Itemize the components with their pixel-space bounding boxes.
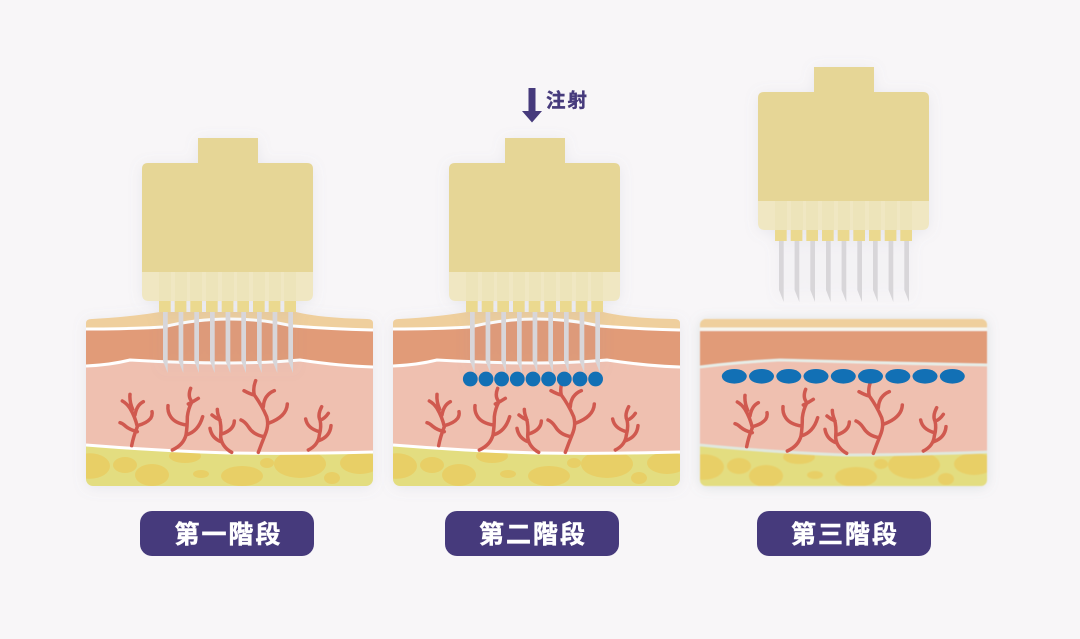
- stage 3 blood vessels: [735, 382, 946, 453]
- stage 3 spread droplets: [722, 369, 965, 384]
- stage 2 label: 第二階段: [479, 520, 587, 549]
- stage 1 label: 第一階段: [174, 520, 283, 549]
- stage 3 label: 第三階段: [791, 520, 899, 549]
- stage 1 label: [140, 511, 314, 556]
- stage 3 label: [757, 511, 931, 556]
- injection caption: 注射: [546, 90, 589, 112]
- stage 1 blood vessels: [120, 381, 331, 452]
- injection arrow: [522, 88, 542, 122]
- stage 3 skin cross-section: [684, 319, 994, 487]
- panel: stage 2: [377, 88, 687, 556]
- stage 2 blood vessels: [427, 381, 638, 452]
- stage 1 skin cross-section: [70, 312, 380, 486]
- panel: stage 1: [70, 138, 380, 556]
- panel: stage 3: [684, 67, 994, 556]
- stage 3 injector device raised: [758, 67, 929, 302]
- stage 2 injector device with needles: [449, 138, 620, 373]
- stage 2 skin cross-section: [377, 312, 687, 486]
- stage 2 label: [445, 511, 619, 556]
- stage 2 injected droplets: [463, 372, 603, 386]
- stage 1 injector device with needles: [142, 138, 313, 373]
